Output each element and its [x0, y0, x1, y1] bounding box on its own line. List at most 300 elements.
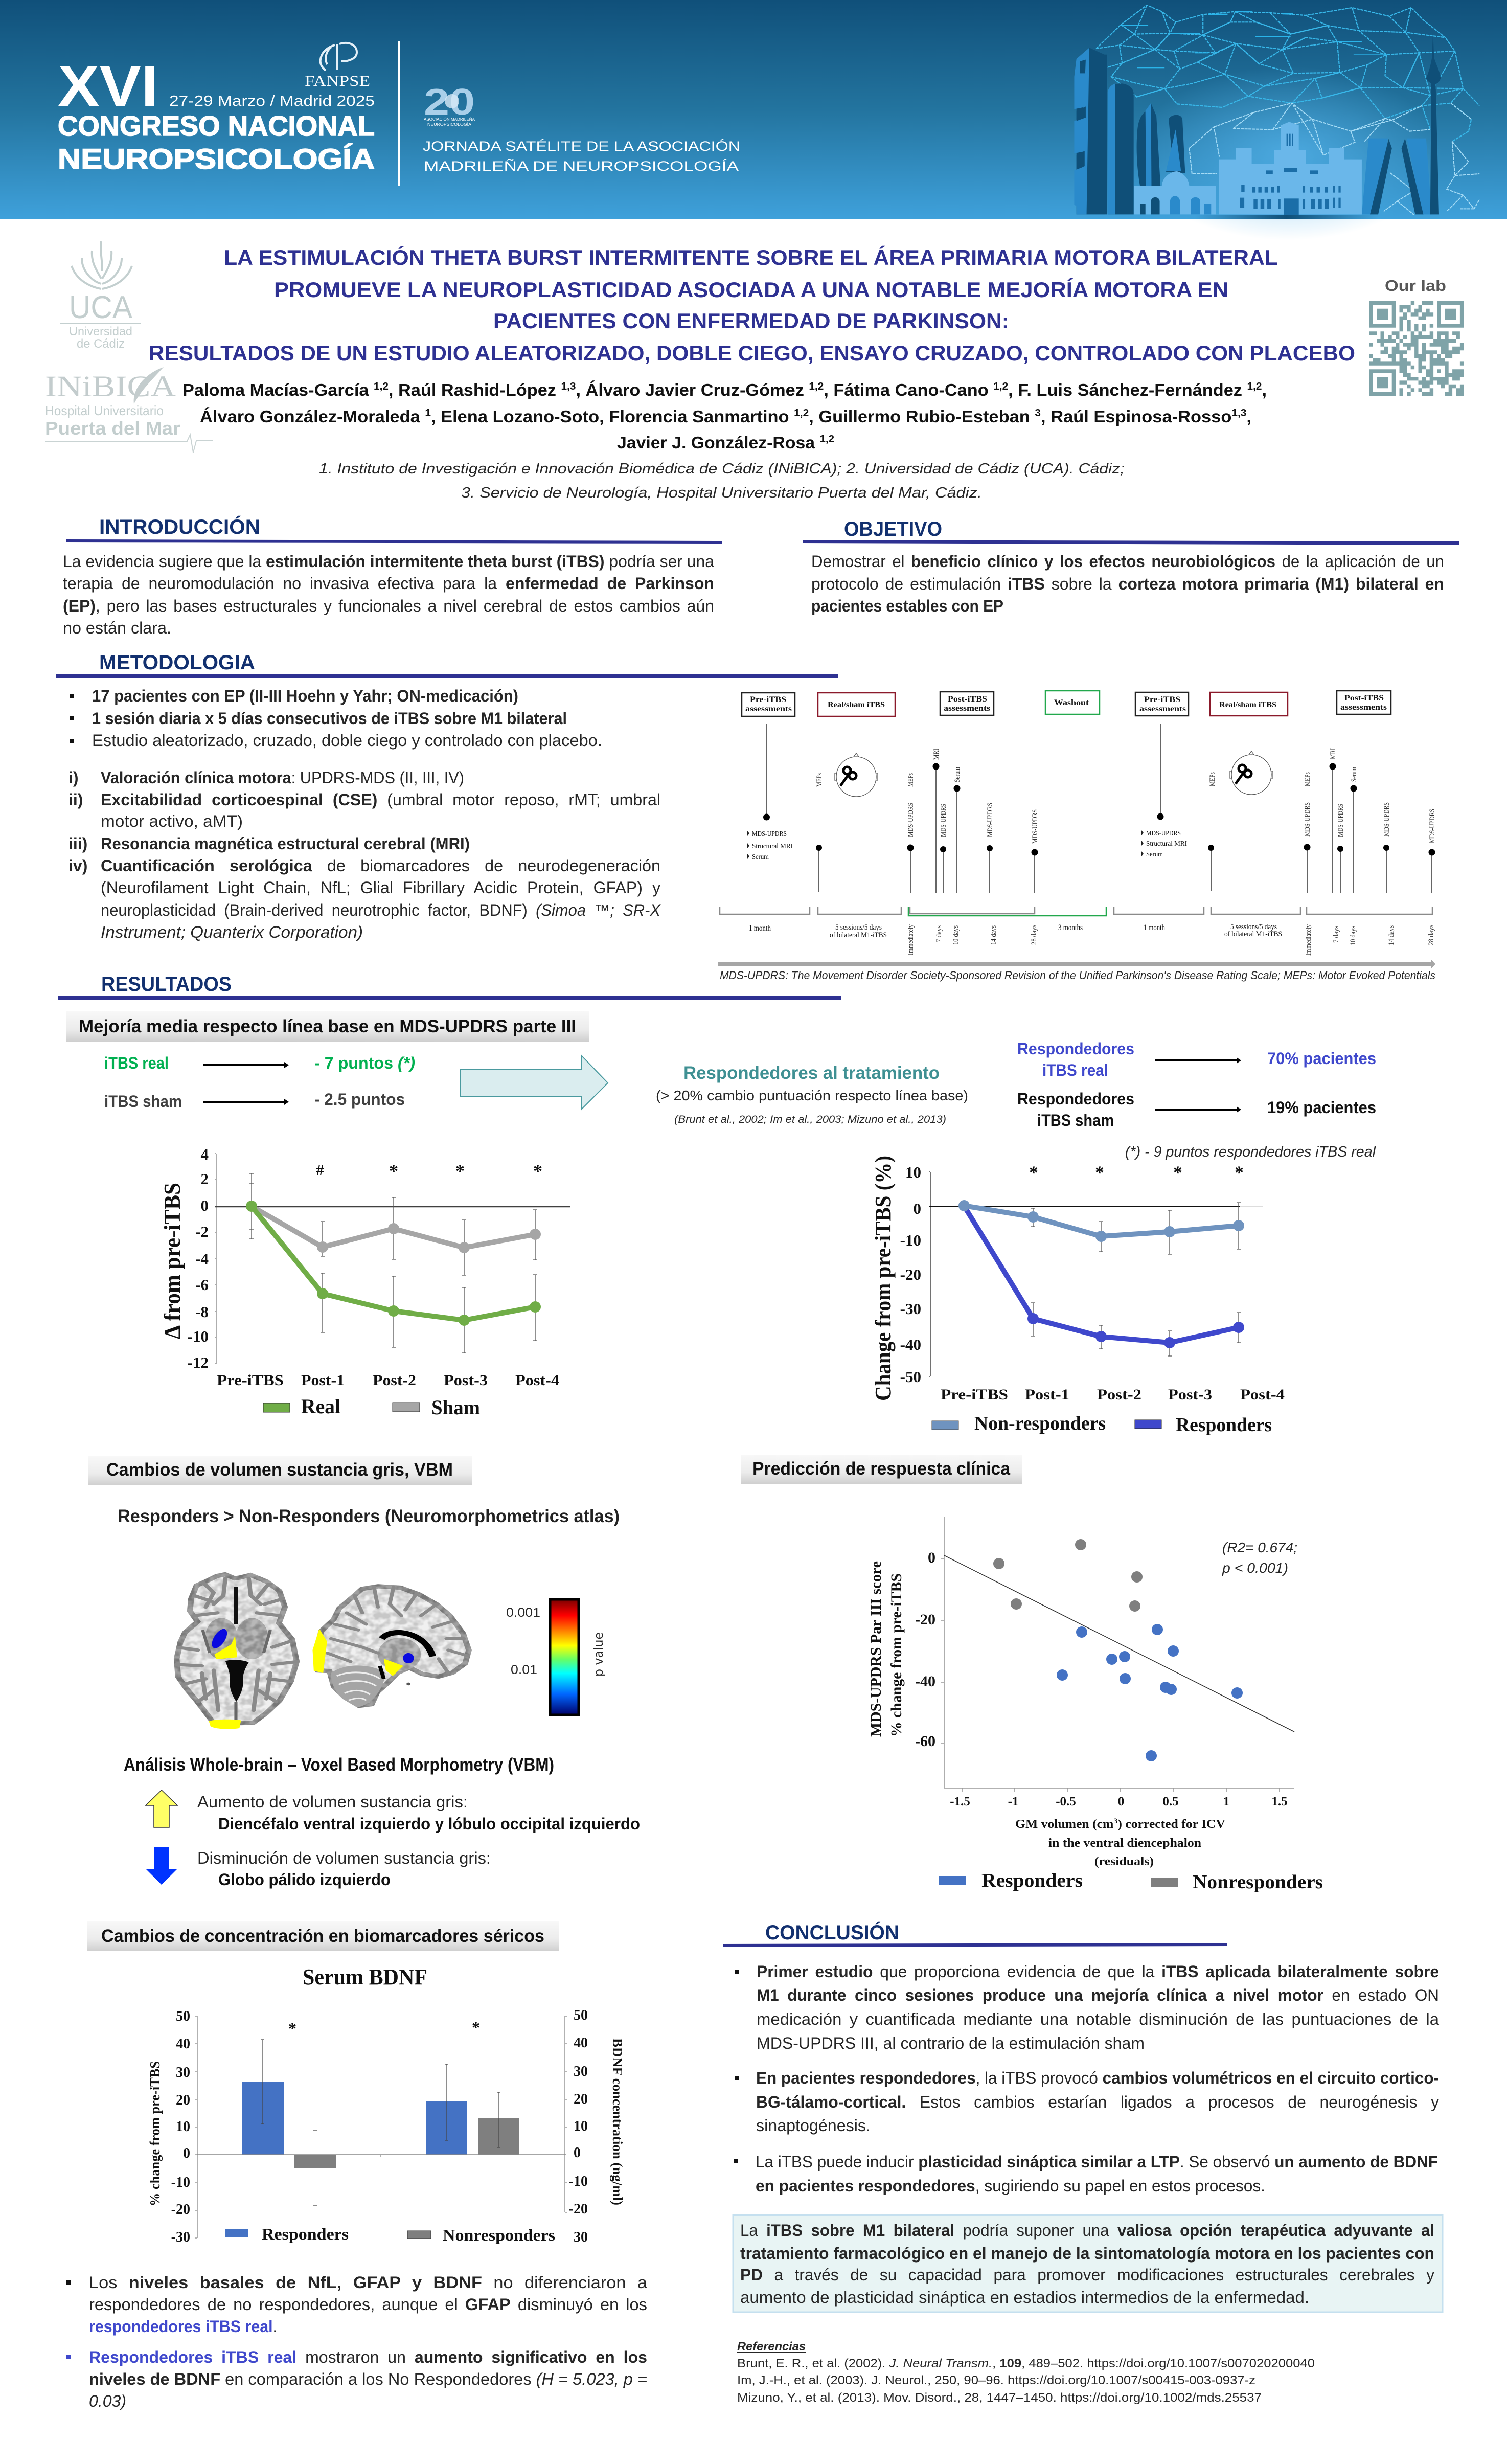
text: conclusion bullets: La iTBS puede inducir plasticidad sináptica similar a LTP. Se observó un aumento de BDNF: [756, 2153, 1438, 2171]
bar axis labels: -10: [171, 2175, 190, 2190]
title: RESULTADOS DE UN ESTUDIO ALEATORIZADO, DOBLE CIEGO, ENSAYO CRUZADO, CONTROLADO CON PLACEBO: [149, 341, 1355, 365]
panel: conclusión: [723, 1920, 1443, 2405]
schematic duration labels: [749, 923, 1435, 956]
heading: metodología: METODOLOGIA: [99, 651, 255, 674]
chart error bars: [249, 1173, 537, 1353]
text: respondedores al tratamiento: (Brunt et al., 2002; Im et al., 2003; Mizuno et al., 2013): [674, 1114, 946, 1125]
schematic rotated measure labels: MDS-UPDRS: [940, 804, 948, 837]
scatter statistics: (R2= 0.674;: [1222, 1540, 1297, 1555]
colour scale: 0.01: [511, 1663, 537, 1677]
title: LA ESTIMULACIÓN THETA BURST INTERMITENTE SOBRE EL ÁREA PRIMARIA MOTORA BILATERAL: [224, 245, 1278, 269]
line chart: real vs sham: [159, 1145, 570, 1419]
schematic duration labels: 10 days: [1349, 926, 1357, 945]
chart legend: Responders: [1176, 1414, 1272, 1436]
list: outcome measures: iii): [68, 834, 87, 853]
text: biomarker findings: respondedores iTBS real.: [89, 2317, 277, 2336]
text: objetivo body: protocolo de estimulación iTBS sobre la corteza motora primaria (M1) bilateral en: [811, 575, 1444, 593]
chart axis labels: Post-4: [515, 1372, 559, 1389]
satellite session text: JORNADA SATÉLITE DE LA ASOCIACIÓN: [423, 138, 740, 154]
bullets: study design: 17 pacientes con EP (II-III Hoehn y Yahr; ON-medicación): [92, 687, 518, 705]
schematic rotated measure labels: Serum: [953, 767, 962, 782]
chart axis labels: -20: [900, 1265, 921, 1283]
Madrid skyline and network: [1074, 5, 1479, 219]
title: PROMUEVE LA NEUROPLASTICIDAD ASOCIADA A UNA NOTABLE MEJORÍA MOTORA EN: [274, 278, 1228, 302]
chart axis labels: -12: [188, 1353, 209, 1371]
schematic phase boxes: [742, 691, 1391, 716]
bar axis labels: [147, 2007, 625, 2245]
authors: Álvaro González-Moraleda 1, Elena Lozano-Soto, Florencia Sanmartino 1,2, Guillermo Rubio-Esteban 3, Raúl Espinosa-Rosso 1,3,: [200, 407, 1251, 426]
bar legend: [225, 2225, 555, 2244]
icon: head with TMS coil (first): [835, 753, 878, 797]
list: outcome measures: neuroplasticidad (Brain-derived neurotrophic factor, BDNF) (Simoa ™; SR-X: [101, 901, 661, 919]
references: Mizuno, Y., et al. (2013). Mov. Disord., 28, 1447–1450. https://doi.org/10.1002/mds.25537: [737, 2391, 1262, 2405]
title: [149, 245, 1355, 365]
congress title block: XVI: [58, 54, 158, 118]
summary: iTBS real vs sham points: iTBS sham: [104, 1092, 182, 1111]
chart legend: Sham: [431, 1396, 480, 1419]
chart axis labels: Post-3: [444, 1372, 488, 1389]
heading: resultados: RESULTADOS: [101, 973, 232, 996]
schematic duration labels: Immediately: [907, 924, 915, 955]
bar axis labels: 30: [176, 2065, 190, 2081]
schematic rotated measure labels: MEPs: [907, 773, 915, 787]
schematic rotated measure labels: MDS-UPDRS: [907, 803, 915, 837]
schematic duration labels: 7 days: [1332, 926, 1340, 943]
significance marks: *: [1173, 1162, 1182, 1183]
series: real: [246, 1201, 541, 1326]
schematic duration labels: of bilateral M1-iTBS: [1224, 930, 1282, 938]
significance marks: *: [472, 2018, 480, 2037]
bar axis labels: 50: [176, 2008, 190, 2024]
list: outcome measures: Resonancia magnética estructural cerebral (MRI): [101, 834, 470, 853]
chart error bars: [1031, 1203, 1241, 1356]
scatter legend: Responders: [981, 1870, 1083, 1891]
brain: sagittal slice: [311, 1583, 474, 1709]
significance marks: [1029, 1162, 1244, 1183]
bar axis labels: BDNF concentration (ng/ml): [610, 2038, 625, 2205]
schematic duration labels: 10 days: [952, 925, 960, 945]
list: outcome measures: ii): [68, 790, 83, 809]
heading: introducción: INTRODUCCIÓN: [99, 515, 260, 538]
text: conclusion bullets: [734, 1962, 1439, 2195]
text: objetivo body: [811, 552, 1444, 615]
scatter axis labels: -1: [1008, 1795, 1018, 1809]
bar axis labels: 30: [574, 2229, 588, 2245]
chart axis labels: [159, 1145, 559, 1389]
icon: yellow up arrow: [146, 1790, 177, 1827]
congress title block: [58, 54, 375, 175]
significance marks: *: [1095, 1162, 1104, 1183]
text: introducción body: [63, 552, 714, 637]
schematic phase boxes: Post-iTBS: [1344, 694, 1384, 703]
schematic duration labels: Immediately: [1305, 924, 1313, 956]
chart axis labels: 2: [200, 1170, 209, 1188]
text: conclusion bullets: En pacientes respondedores, la iTBS provocó cambios volumétricos en el circuito cortico-: [756, 2069, 1439, 2087]
summary: iTBS real vs sham points: [104, 1054, 415, 1111]
chart axis labels: Post-3: [1168, 1386, 1212, 1403]
congress title block: NEUROPSICOLOGÍA: [58, 143, 375, 175]
schematic caption: MDS-UPDRS: The Movement Disorder Society-Sponsored Revision of the Unified Parkinson's Disease Rating Scale; MEPs: Motor Evoked Potentials: [720, 969, 1435, 982]
line chart: responders vs non-responders: [871, 1156, 1285, 1436]
summary: responder percentages: iTBS real: [1042, 1061, 1108, 1079]
text: conclusion bullets: en pacientes respondedores, sugiriendo su papel en estos procesos.: [756, 2177, 1265, 2195]
scatter statistics: p < 0.001): [1222, 1560, 1288, 1576]
schematic rotated measure labels: [815, 748, 1436, 844]
scatter axis labels: -1.5: [950, 1795, 970, 1809]
summary: responder percentages: Respondedores: [1017, 1090, 1134, 1108]
significance marks: *: [533, 1161, 542, 1181]
bar axis labels: -10: [569, 2174, 588, 2189]
subheading: VBM: Cambios de volumen sustancia gris, VBM: [106, 1460, 453, 1480]
text: biomarker findings: 0.03): [89, 2392, 126, 2410]
title: PACIENTES CON ENFERMEDAD DE PARKINSON:: [493, 309, 1009, 333]
callout: main conclusion: tratamiento farmacológico en el manejo de la sintomatología motora en los pacientes con: [740, 2244, 1434, 2263]
congress title block: 27-29 Marzo / Madrid 2025: [169, 93, 375, 109]
summary: iTBS real vs sham points: iTBS real: [104, 1054, 169, 1072]
header banner: [0, 0, 1507, 240]
panel: introducción: [63, 515, 722, 637]
scatter statistics: [1222, 1540, 1297, 1576]
schematic rotated measure labels: MDS-UPDRS: [1304, 802, 1312, 837]
text: increase in grey matter: [197, 1793, 640, 1833]
FANPSE logo: [305, 43, 370, 89]
text: respondedores al tratamiento: Respondedores al tratamiento: [683, 1063, 940, 1083]
chart axis labels: Δ from pre-iTBS: [159, 1183, 185, 1339]
scatter axis labels: GM volumen (cm 3) corrected for ICV: [1015, 1817, 1226, 1831]
references: Referencias: [737, 2340, 806, 2354]
bar axis labels: 10: [176, 2119, 190, 2135]
subheading: predicción: Predicción de respuesta clínica: [752, 1459, 1011, 1479]
text: decrease in grey matter: Disminución de volumen sustancia gris:: [197, 1849, 491, 1867]
schematic baseline assessment lists: Serum: [1146, 851, 1163, 858]
schematic baseline assessment lists: Structural MRI: [752, 843, 793, 850]
text: introducción body: no están clara.: [63, 619, 171, 637]
series: responders: [965, 1208, 1244, 1348]
text: increase in grey matter: Aumento de volumen sustancia gris:: [197, 1793, 468, 1811]
chart axis labels: Post-2: [1097, 1386, 1141, 1403]
schematic rotated measure labels: MDS-UPDRS: [1383, 802, 1391, 837]
schematic baseline assessment lists: Serum: [752, 853, 769, 861]
bar axis labels: 10: [574, 2118, 588, 2134]
schematic duration labels: of bilateral M1-iTBS: [830, 931, 887, 939]
text: conclusion bullets: medicación y cuantificada mediante una notable disminución de las puntuaciones de la: [757, 2010, 1439, 2028]
nonresponder points: [993, 1539, 1143, 1612]
text: decrease in grey matter: Globo pálido izquierdo: [218, 1870, 391, 1889]
text: biomarker findings: niveles de BDNF en comparación a los No Respondedores (H = 5.023, p =: [89, 2370, 647, 2388]
significance marks: [288, 2018, 480, 2038]
summary: responder percentages: 70% pacientes: [1267, 1049, 1376, 1068]
schematic phase boxes: Pre-iTBS: [750, 695, 786, 704]
list: outcome measures: Excitabilidad corticoespinal (CSE) (umbral motor reposo, rMT; umbral: [101, 790, 660, 809]
arrow: timeline: [718, 960, 1435, 968]
scatter axis labels: -40: [915, 1673, 935, 1690]
schematic duration labels: 5 sessions/5 days: [1230, 923, 1277, 931]
significance marks: *: [455, 1161, 465, 1181]
heading: conclusión: CONCLUSIÓN: [765, 1920, 899, 1944]
bar axis labels: -20: [569, 2201, 588, 2217]
schematic phase boxes: Real/sham iTBS: [1219, 700, 1276, 709]
schematic rotated measure labels: MEPs: [815, 773, 824, 787]
chart axis labels: 0: [913, 1200, 921, 1217]
bullets: study design: 1 sesión diaria x 5 días consecutivos de iTBS sobre M1 bilateral: [92, 709, 567, 728]
bar axis labels: 30: [574, 2064, 588, 2079]
UCA logo: Universidad: [69, 325, 132, 338]
scatter axis labels: 0: [1118, 1795, 1124, 1809]
significance marks: *: [288, 2019, 296, 2038]
callout: main conclusion: aumento de plasticidad sináptica en estadios intermedios de la enfermedad.: [740, 2288, 1309, 2307]
satellite session text: [423, 138, 740, 174]
QR code: [1369, 277, 1464, 396]
INiBICA and Hospital Puerta del Mar logo: Puerta del Mar: [45, 418, 180, 439]
scatter axis labels: in the ventral diencephalon: [1048, 1837, 1201, 1850]
scatter plot: [867, 1517, 1323, 1893]
bar axis labels: 0: [574, 2145, 581, 2161]
list: outcome measures: Instrument; Quanterix Corporation): [101, 923, 363, 941]
QR code: Our lab: [1385, 277, 1446, 295]
subheading: predicción: [741, 1455, 1022, 1484]
summary: responder percentages: [1017, 1039, 1377, 1160]
affiliations: 1. Instituto de Investigación e Innovación Biomédica de Cádiz (INiBICA); 2. Universidad de Cádiz (UCA). Cádiz;: [319, 461, 1125, 477]
scatter axis labels: 0.5: [1162, 1795, 1179, 1809]
schematic phase boxes: assessments: [1340, 703, 1387, 712]
colour scale: p value: [591, 1632, 606, 1677]
schematic rotated measure labels: MDS-UPDRS: [1337, 804, 1345, 837]
bar axis labels: -30: [171, 2229, 190, 2245]
bar chart: serum BDNF: [147, 1964, 625, 2245]
text: conclusion bullets: M1 durante cinco sesiones produce una mejoría clínica a nivel motor en estado ON: [757, 1986, 1439, 2004]
significance marks: *: [1029, 1162, 1038, 1183]
text: biomarker findings: Los niveles basales de NfL, GFAP y BDNF no diferenciaron a: [89, 2273, 647, 2292]
summary: responder percentages: (*) - 9 puntos respondedores iTBS real: [1125, 1144, 1377, 1160]
20th anniversary logo: NEUROPSICOLOGÍA: [427, 122, 472, 127]
references: Brunt, E. R., et al. (2002). J. Neural Transm. , 109, 489–502. https://doi.org/10.1007/s007020200040: [737, 2357, 1315, 2370]
INiBICA and Hospital Puerta del Mar logo: [45, 367, 213, 453]
heading: resultados: [58, 973, 841, 1000]
schematic rotated measure labels: MRI: [1329, 748, 1337, 759]
text: introducción body: terapia de neuromodulación no invasiva efectiva para la enfermedad de Parkinson: [63, 574, 714, 593]
schematic rotated measure labels: MDS-UPDRS: [1031, 809, 1039, 844]
scatter axis labels: 1.5: [1271, 1795, 1288, 1809]
chart legend: [263, 1395, 480, 1419]
schematic duration labels: 28 days: [1030, 925, 1038, 945]
chart axis labels: 0: [200, 1196, 209, 1214]
chart axis labels: -10: [900, 1231, 921, 1249]
callout: main conclusion: La iTBS sobre M1 bilateral podría suponer una valiosa opción terapéutica adyuvante al: [740, 2221, 1434, 2240]
schematic duration brackets: [720, 907, 1432, 916]
chart legend: [932, 1413, 1272, 1436]
schematic baseline assessment lists: Structural MRI: [1146, 840, 1187, 848]
authors: [182, 380, 1267, 452]
schematic rotated measure labels: MEPs: [1208, 772, 1217, 786]
text: objetivo body: Demostrar el beneficio clínico y los efectos neurobiológicos de la aplicación de un: [811, 552, 1444, 571]
chart axis labels: Pre-iTBS: [217, 1372, 284, 1389]
chart axis labels: -50: [900, 1368, 921, 1386]
bar axis labels: 50: [574, 2007, 588, 2023]
text: contrast label: Responders > Non-Responders (Neuromorphometrics atlas): [118, 1506, 620, 1526]
FANPSE logo: FANPSE: [305, 73, 370, 89]
chart legend: Non-responders: [974, 1413, 1106, 1434]
schematic timepoint dots: [763, 763, 1435, 856]
scatter axis labels: [867, 1549, 1288, 1868]
text: conclusion bullets: sinaptogénesis.: [756, 2116, 871, 2135]
summary: responder percentages: iTBS sham: [1037, 1111, 1114, 1129]
colour scale: 0.001: [506, 1606, 540, 1620]
chart axis labels: -8: [195, 1303, 209, 1321]
scatter legend: Nonresponders: [1193, 1871, 1323, 1893]
list: outcome measures: (Neurofilament Light Chain, NfL; Glial Fibrillary Acidic Protein, GFAP) y: [101, 878, 660, 897]
schematic baseline assessment lists: MDS-UPDRS: [752, 830, 787, 838]
bar axis labels: 0: [183, 2145, 190, 2161]
bar error bars: [261, 2040, 500, 2205]
schematic duration labels: 14 days: [1387, 925, 1396, 945]
authors: Javier J. González-Rosa 1,2: [617, 433, 834, 452]
chart legend: Real: [301, 1395, 340, 1418]
affiliations: [319, 461, 1125, 501]
list: outcome measures: Cuantificación serológica de biomarcadores de neurodegeneración: [101, 856, 660, 875]
schematic duration labels: 1 month: [749, 924, 771, 933]
heading: objetivo: OBJETIVO: [844, 518, 942, 540]
chart axis labels: 4: [200, 1145, 209, 1163]
schematic rotated measure labels: MDS-UPDRS: [1428, 809, 1436, 843]
references: Im, J.-H., et al. (2003). J. Neurol., 250, 90–96. https://doi.org/10.1007/s00415-003-0937-z: [737, 2373, 1255, 2387]
scatter axis labels: -20: [915, 1611, 935, 1628]
text: biomarker findings: [66, 2273, 647, 2410]
significance marks: #: [316, 1162, 324, 1179]
bar axis labels: 40: [176, 2036, 190, 2052]
text: biomarker findings: Respondedores iTBS real mostraron un aumento significativo en los: [89, 2348, 647, 2366]
20th anniversary logo: ASOCIACIÓN MADRILEÑA: [424, 117, 475, 122]
scatter axis labels: -60: [915, 1733, 935, 1750]
text: introducción body: (EP), pero las bases estructurales y funcionales a nivel cerebral de estos cambios aún: [63, 597, 714, 615]
callout: main conclusion: [733, 2215, 1443, 2312]
schematic duration labels: 5 sessions/5 days: [835, 923, 882, 932]
text: conclusion bullets: Primer estudio que proporciona evidencia de que la iTBS aplicada bilateralmente sobre: [757, 1962, 1439, 1981]
bar axis labels: -20: [171, 2202, 190, 2218]
icon: blue down arrow: [146, 1847, 177, 1885]
schematic rotated measure labels: MRI: [932, 749, 941, 760]
summary: responder percentages: Respondedores: [1017, 1039, 1134, 1058]
brain: axial slice: [171, 1570, 304, 1729]
panel: objetivo: [803, 518, 1459, 615]
summary: iTBS real vs sham points: - 2.5 puntos: [314, 1090, 405, 1109]
list: outcome measures: iv): [68, 856, 87, 875]
series: sham: [252, 1206, 541, 1253]
schematic duration labels: 7 days: [935, 925, 943, 942]
chart axis labels: -6: [195, 1276, 209, 1294]
schematic duration labels: 28 days: [1427, 925, 1435, 945]
callout: main conclusion: PD a través de su capacidad para promover modificaciones estructurales cerebrales y: [740, 2266, 1434, 2284]
text: respondedores al tratamiento: [656, 1063, 968, 1125]
bar axis labels: 20: [176, 2092, 190, 2108]
trend line: [944, 1555, 1294, 1732]
subheading: mejoría media: Mejoría media respecto línea base en MDS-UPDRS parte III: [79, 1016, 576, 1036]
bullets: study design: Estudio aleatorizado, cruzado, doble ciego y controlado con placebo.: [92, 731, 602, 750]
text: increase in grey matter: Diencéfalo ventral izquierdo y lóbulo occipital izquierdo: [218, 1815, 640, 1833]
affiliations: 3. Servicio de Neurología, Hospital Universitario Puerta del Mar, Cádiz.: [461, 485, 982, 501]
bars: [242, 2082, 519, 2168]
schematic duration labels: 14 days: [990, 925, 998, 945]
list: outcome measures: [68, 768, 661, 941]
20th anniversary logo: 20: [424, 82, 475, 123]
schematic rotated measure labels: MDS-UPDRS: [986, 803, 994, 837]
schematic phase boxes: assessments: [1139, 705, 1186, 713]
chart axis labels: -40: [900, 1336, 921, 1353]
schematic rotated measure labels: Serum: [1350, 767, 1358, 782]
chart axis labels: Change from pre-iTBS (%): [871, 1156, 896, 1401]
text: biomarker findings: respondedores de no respondedores, aunque el GFAP disminuyó en los: [89, 2295, 647, 2314]
schematic baseline assessment lists: MDS-UPDRS: [1146, 830, 1181, 838]
scatter axis labels: (residuals): [1094, 1855, 1154, 1868]
schematic phase boxes: Pre-iTBS: [1144, 695, 1180, 704]
schematic duration labels: 3 months: [1058, 923, 1083, 932]
INiBICA and Hospital Puerta del Mar logo: Hospital Universitario: [45, 403, 164, 418]
icon: head with TMS coil (second): [1230, 751, 1273, 795]
bar legend: Responders: [262, 2225, 349, 2243]
chart axis labels: Pre-iTBS: [941, 1386, 1008, 1403]
study design schematic: [718, 691, 1436, 982]
schematic timeline stems: [767, 724, 1432, 893]
text: conclusion bullets: BG-tálamo-cortical. Estos cambios estarían ligados a procesos de neurogénesis y: [756, 2093, 1439, 2111]
bar axis labels: 40: [574, 2035, 588, 2051]
schematic phase boxes: assessments: [745, 705, 792, 713]
series: non-responders: [958, 1200, 1244, 1242]
panel: metodología: [56, 651, 838, 941]
summary: responder percentages: 19% pacientes: [1267, 1098, 1376, 1117]
bar axis labels: % change from pre-iTBS: [147, 2061, 163, 2206]
scatter axis labels: 1: [1223, 1795, 1229, 1809]
schematic phase boxes: assessments: [944, 704, 990, 713]
list: outcome measures: motor activo, aMT): [101, 812, 243, 830]
chart axis labels: Post-4: [1240, 1386, 1285, 1403]
INiBICA and Hospital Puerta del Mar logo: INiBICA: [45, 370, 176, 403]
text: objetivo body: pacientes estables con EP: [811, 597, 1003, 615]
scatter axis labels: % change from pre-iTBS: [888, 1573, 905, 1737]
scatter axis labels: 0: [928, 1549, 935, 1566]
list: outcome measures: i): [68, 768, 79, 787]
text: VBM analysis: Análisis Whole-brain – Voxel Based Morphometry (VBM): [124, 1755, 554, 1775]
UCA logo: de Cádiz: [77, 337, 125, 351]
bar chart: serum BDNF: Serum BDNF: [303, 1964, 427, 1990]
references: [737, 2340, 1315, 2405]
UCA logo: UCA: [69, 290, 133, 325]
subheading: biomarcadores: Cambios de concentración en biomarcadores séricos: [101, 1926, 544, 1946]
list: outcome measures: Valoración clínica motora: UPDRS-MDS (II, III, IV): [101, 768, 464, 787]
scatter legend: [939, 1870, 1323, 1893]
schematic phase boxes: Real/sham iTBS: [828, 700, 885, 709]
chart axis labels: Post-1: [1025, 1386, 1069, 1403]
arrow: to responders: [461, 1055, 608, 1110]
chart axis labels: -2: [195, 1223, 209, 1240]
summary: iTBS real vs sham points: - 7 puntos (*): [314, 1054, 415, 1072]
brain images: [171, 1570, 474, 1729]
chart axis labels: -10: [188, 1327, 209, 1345]
chart axis labels: Post-2: [373, 1372, 416, 1389]
subheading: VBM: [88, 1456, 472, 1485]
text: introducción body: La evidencia sugiere que la estimulación intermitente theta burst (iTBS) podría ser una: [63, 552, 714, 571]
schematic phase boxes: Washout: [1054, 698, 1089, 707]
chart axis labels: 10: [905, 1163, 921, 1181]
bullets: study design: [70, 687, 602, 750]
chart axis labels: Post-1: [301, 1372, 345, 1389]
subheading: mejoría media: [66, 1011, 589, 1042]
significance marks: *: [389, 1161, 398, 1181]
schematic phase boxes: Post-iTBS: [948, 695, 987, 704]
chart axis labels: [871, 1156, 1285, 1403]
satellite session text: MADRILEÑA DE NEUROPSICOLOGÍA: [424, 158, 739, 174]
UCA logo: [60, 241, 141, 351]
scatter axis labels: -0.5: [1056, 1795, 1076, 1809]
schematic baseline assessment lists: [747, 830, 1187, 861]
